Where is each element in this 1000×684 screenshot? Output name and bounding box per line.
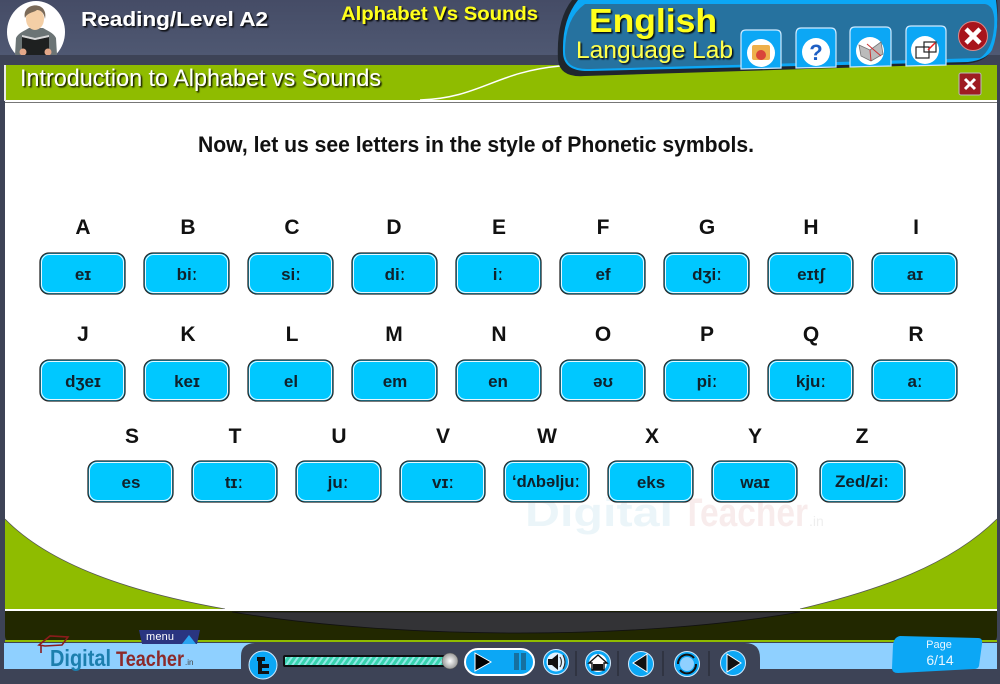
letter N: N xyxy=(491,323,507,346)
letter Z: Z xyxy=(856,425,869,448)
letters row 3 xyxy=(88,425,905,502)
letter Q xyxy=(768,323,853,401)
letter S: S xyxy=(125,425,139,448)
letter W: W xyxy=(537,425,557,448)
letter X: eks xyxy=(637,473,665,492)
letter W xyxy=(504,425,589,502)
watermark: Teacher xyxy=(682,491,808,535)
page counter: 6/14 xyxy=(926,652,954,668)
panel title: Introduction to Alphabet vs Sounds xyxy=(20,65,381,92)
icon: help tab xyxy=(796,28,836,68)
letter A: A xyxy=(75,216,91,239)
menu tab: menu xyxy=(146,631,174,643)
watermark: Digital xyxy=(525,491,673,535)
letter M: em xyxy=(383,372,407,391)
letter Y xyxy=(712,425,797,502)
letter S xyxy=(88,425,173,502)
icon: window tab xyxy=(906,26,946,66)
instruction text: Now, let us see letters in the style of Phonetic symbols. xyxy=(198,132,754,157)
heading: topic: Alphabet Vs Sounds xyxy=(341,4,538,25)
letter G: dʒiː xyxy=(692,265,722,284)
letter S: es xyxy=(122,473,140,492)
icon: book tab xyxy=(850,27,891,67)
letter X: X xyxy=(645,425,659,448)
logo: Digital Teacher: Digital xyxy=(50,645,111,671)
letter J: dʒeɪ xyxy=(65,372,101,391)
progress bar xyxy=(283,653,458,669)
letter M xyxy=(352,323,437,401)
letter X xyxy=(608,425,693,502)
letter B xyxy=(144,216,229,294)
header tab: English Language Lab: English xyxy=(589,2,717,39)
letters row 1 xyxy=(40,216,957,294)
icon: contents button xyxy=(249,651,277,679)
letter E: E xyxy=(492,216,506,239)
letter I: aɪ xyxy=(907,265,923,284)
letter J: J xyxy=(77,323,89,346)
letter K: K xyxy=(180,323,196,346)
icon: next xyxy=(720,650,746,676)
header bar xyxy=(0,0,1000,65)
icon: replay xyxy=(674,652,700,676)
letter K: keɪ xyxy=(174,372,200,391)
icon: gallery tab xyxy=(741,30,781,69)
letter Z: Zed/ziː xyxy=(835,472,889,491)
letter G: G xyxy=(699,216,715,239)
heading: level: Reading/Level A2 xyxy=(81,9,268,31)
letter Y: waɪ xyxy=(739,473,770,492)
letter D: D xyxy=(386,216,402,239)
letter T: tɪː xyxy=(225,473,243,492)
watermark xyxy=(525,491,824,535)
letters row 2 xyxy=(40,323,957,401)
footer band xyxy=(4,643,997,669)
letter I: I xyxy=(913,216,919,239)
panel close button xyxy=(959,73,981,95)
letter K xyxy=(144,323,229,401)
letter D: diː xyxy=(385,265,405,284)
letter N: en xyxy=(488,372,508,391)
letter M: M xyxy=(385,323,403,346)
letter F xyxy=(560,216,645,294)
letter F: ef xyxy=(595,265,611,284)
letter D xyxy=(352,216,437,294)
letter C xyxy=(248,216,333,294)
letter F: F xyxy=(597,216,610,239)
letter I xyxy=(872,216,957,294)
letter Z xyxy=(820,425,905,502)
letter O: əʊ xyxy=(593,372,613,391)
watermark: .in xyxy=(809,513,824,529)
letter U: juː xyxy=(327,473,348,492)
letter A: eɪ xyxy=(75,265,91,284)
icon: home xyxy=(586,650,610,676)
letter H xyxy=(768,216,853,294)
letter P: P xyxy=(700,323,714,346)
logo: Digital Teacher: Teacher xyxy=(116,648,184,671)
letter W: ʻdʌbəljuː xyxy=(512,472,580,491)
letter R: R xyxy=(908,323,924,346)
page counter: Page xyxy=(926,639,952,651)
letter P: piː xyxy=(697,372,717,391)
icon: help tab: ? xyxy=(809,40,823,65)
letter R: aː xyxy=(907,372,923,391)
letter B: B xyxy=(180,216,196,239)
letter L xyxy=(248,323,333,401)
letter C: C xyxy=(284,216,300,239)
page counter xyxy=(892,636,982,673)
letter J xyxy=(40,323,125,401)
menu tab xyxy=(139,630,200,644)
letter P xyxy=(664,323,749,401)
letter H: eɪtʃ xyxy=(797,265,826,284)
letter U xyxy=(296,425,381,502)
header tab: English Language Lab: Language Lab xyxy=(576,37,733,64)
letter C: siː xyxy=(281,265,301,284)
letter Q: Q xyxy=(803,323,819,346)
letter Y: Y xyxy=(748,425,762,448)
letter O xyxy=(560,323,645,401)
right frame edge xyxy=(997,65,1000,669)
icon: sound xyxy=(544,650,568,674)
letter V: V xyxy=(436,425,450,448)
header tab: English Language Lab xyxy=(558,0,998,76)
letter B: biː xyxy=(177,265,197,284)
letter V: vɪː xyxy=(432,473,454,492)
letter O: O xyxy=(595,323,611,346)
letter V xyxy=(400,425,485,502)
control dividers xyxy=(576,651,709,676)
logo: Digital Teacher xyxy=(39,636,193,671)
letter T xyxy=(192,425,277,502)
letter H: H xyxy=(803,216,819,239)
letter U: U xyxy=(331,425,347,448)
letter T: T xyxy=(229,425,242,448)
letter Q: kjuː xyxy=(796,372,826,391)
letter G xyxy=(664,216,749,294)
icon: student reading xyxy=(7,1,65,55)
play and pause control xyxy=(465,649,534,675)
letter N xyxy=(456,323,541,401)
letter L: el xyxy=(284,372,298,391)
letter E xyxy=(456,216,541,294)
letter R xyxy=(872,323,957,401)
icon: previous xyxy=(628,652,654,676)
icon: close app xyxy=(958,22,988,50)
logo: Digital Teacher: .in xyxy=(185,658,193,667)
letter A xyxy=(40,216,125,294)
letter E: iː xyxy=(493,265,503,284)
letter L: L xyxy=(286,323,299,346)
